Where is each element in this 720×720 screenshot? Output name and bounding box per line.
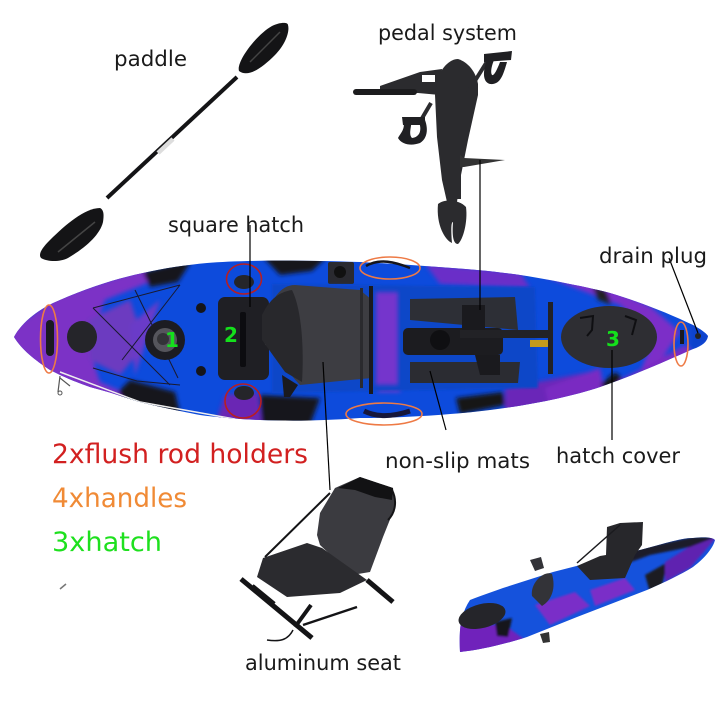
callout rings: rod holders [225, 264, 262, 418]
bungee cord [93, 285, 180, 385]
square hatch [218, 297, 269, 380]
drain plug [695, 333, 701, 339]
cockpit well [272, 284, 538, 393]
labels: pedal system [378, 21, 517, 45]
legend: 3xhatch [52, 527, 162, 558]
labels: non-slip mats [385, 449, 530, 473]
hatch numbers: 3 [606, 327, 620, 351]
seat on deck [262, 285, 372, 397]
left pedal [421, 103, 431, 120]
callout rings: handles [40, 257, 688, 425]
perspective seat [577, 522, 643, 580]
non-slip mats [410, 297, 520, 383]
legend: 2xflush rod holders [52, 439, 308, 470]
pedal flippers [438, 200, 466, 244]
hull drain line [58, 376, 70, 392]
labels: hatch cover [556, 444, 680, 468]
pedal mast [435, 95, 478, 202]
kayak top view [14, 260, 708, 421]
front mount [328, 262, 354, 284]
perspective hatch cover [456, 599, 508, 633]
icon: paddle [40, 23, 288, 261]
seat pan [257, 543, 367, 597]
pedal drive on deck [403, 302, 553, 375]
stray mark [60, 584, 66, 589]
legend: 4xhandles [52, 483, 187, 514]
labels: drain plug [599, 244, 707, 268]
pedal dome [435, 59, 478, 95]
right pedal [468, 60, 488, 92]
hatch numbers: 1 [165, 328, 179, 352]
bow small hatch [67, 321, 97, 353]
side handles [366, 262, 410, 268]
hatch numbers: 2 [224, 323, 238, 347]
flush rod holders [234, 275, 254, 289]
hull base colour [14, 260, 708, 421]
labels [114, 21, 707, 675]
labels: paddle [114, 47, 187, 71]
leader lines [250, 160, 698, 490]
hatch cover oval [561, 306, 657, 368]
pedal handle bar [380, 69, 442, 95]
stern handle [680, 330, 684, 344]
labels: square hatch [168, 213, 304, 237]
icon: pedal system [353, 51, 512, 244]
pedal fin [460, 155, 505, 167]
bow handle [46, 320, 54, 356]
round hatch 1 [145, 320, 185, 360]
icon: aluminum seat [241, 477, 395, 641]
labels: aluminum seat [245, 651, 401, 675]
seat back [317, 477, 395, 575]
perspective pedal [530, 557, 554, 606]
legend [52, 439, 308, 558]
hatch numbers [165, 323, 620, 352]
kayak perspective view [455, 522, 720, 660]
